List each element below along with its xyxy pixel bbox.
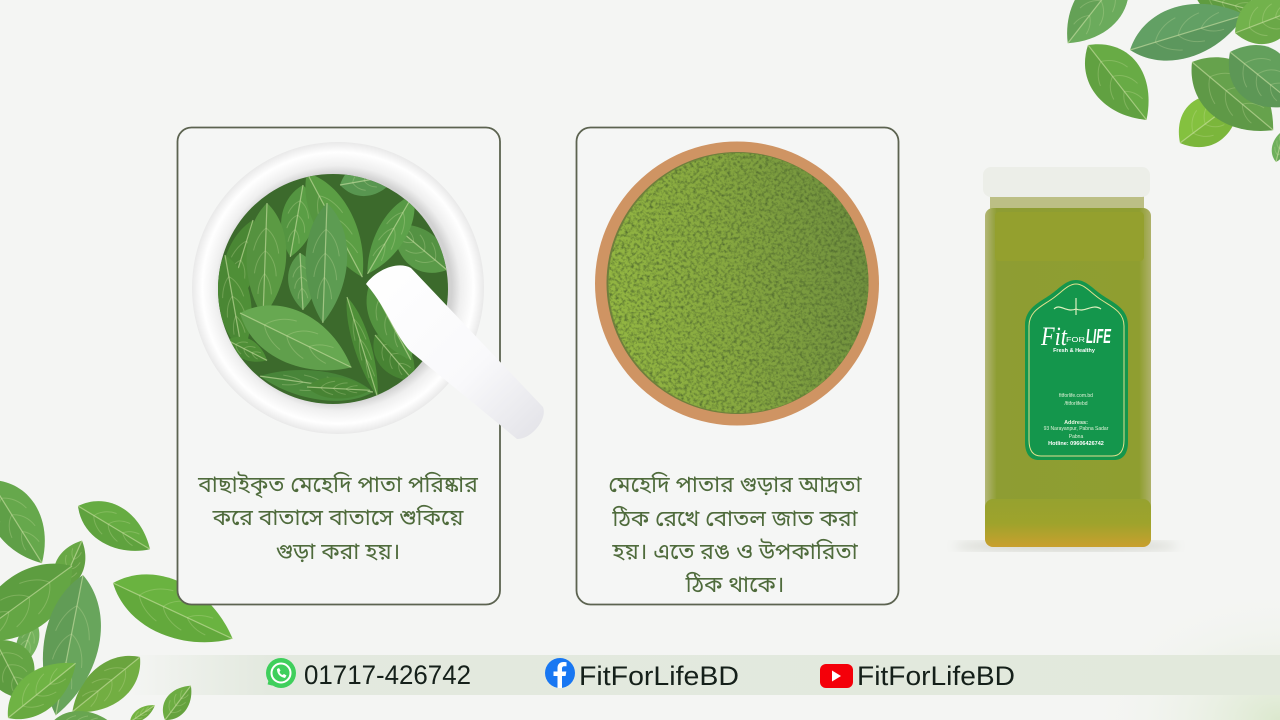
label: fitforlife.com.bd <box>1059 393 1093 399</box>
label: /fitforlifebd <box>1064 401 1088 407</box>
label: Fit <box>1040 322 1068 351</box>
card text: mortar caption: গুড়া করা হয়। <box>276 539 400 569</box>
card text: powder caption: হয়। এতে রঙ ও উপকারিতা <box>611 539 859 569</box>
jar lid <box>983 167 1150 197</box>
panel: powder card <box>576 128 898 604</box>
label <box>1025 280 1128 460</box>
image: mortar with leaves and pestle <box>192 142 544 439</box>
label: FOR <box>1066 337 1085 344</box>
jar shoulder <box>995 212 1144 261</box>
icon: whatsapp <box>266 658 296 688</box>
icon: youtube <box>820 664 853 688</box>
label: Address: <box>1064 420 1088 426</box>
contact: facebook: FitForLifeBD <box>579 661 739 691</box>
image: product jar <box>954 167 1178 551</box>
jar neck <box>990 190 1144 214</box>
panel: mortar card <box>178 128 500 604</box>
label: Pabna <box>1069 434 1083 440</box>
jar bottom band <box>985 499 1151 547</box>
jar shadow <box>954 541 1178 551</box>
label: Fresh & Healthy <box>1053 348 1096 354</box>
label: Hotline: 09606426742 <box>1048 441 1104 447</box>
icon: facebook <box>545 658 575 688</box>
label: LIFE <box>1086 326 1111 348</box>
image: wooden bowl of powder <box>595 142 879 426</box>
leaves: top right cluster <box>1050 0 1280 164</box>
card text: powder caption: মেহেদি পাতার গুড়ার আদ্রতা <box>608 472 863 502</box>
card text: mortar caption: বাছাইকৃত মেহেদি পাতা পরিষ্কার <box>197 472 478 502</box>
leaves in mortar <box>218 174 446 401</box>
card text: powder caption: ঠিক থাকে। <box>685 572 784 602</box>
label: 93 Narayanpur, Pabna Sadar <box>1044 426 1109 432</box>
card text: powder caption: ঠিক রেখে বোতল জাত করা <box>611 506 859 536</box>
background green glow <box>960 500 1280 720</box>
pestle <box>366 265 544 439</box>
label ornament <box>1054 298 1101 315</box>
leaves: bottom left cluster <box>0 467 245 720</box>
contact: youtube: FitForLifeBD <box>857 661 1015 691</box>
contact: whatsapp: 01717-426742 <box>304 660 471 690</box>
contact bar band <box>130 655 1280 695</box>
jar body <box>985 208 1151 546</box>
card text: mortar caption: করে বাতাসে বাতাসে শুকিয়ে <box>212 505 464 535</box>
